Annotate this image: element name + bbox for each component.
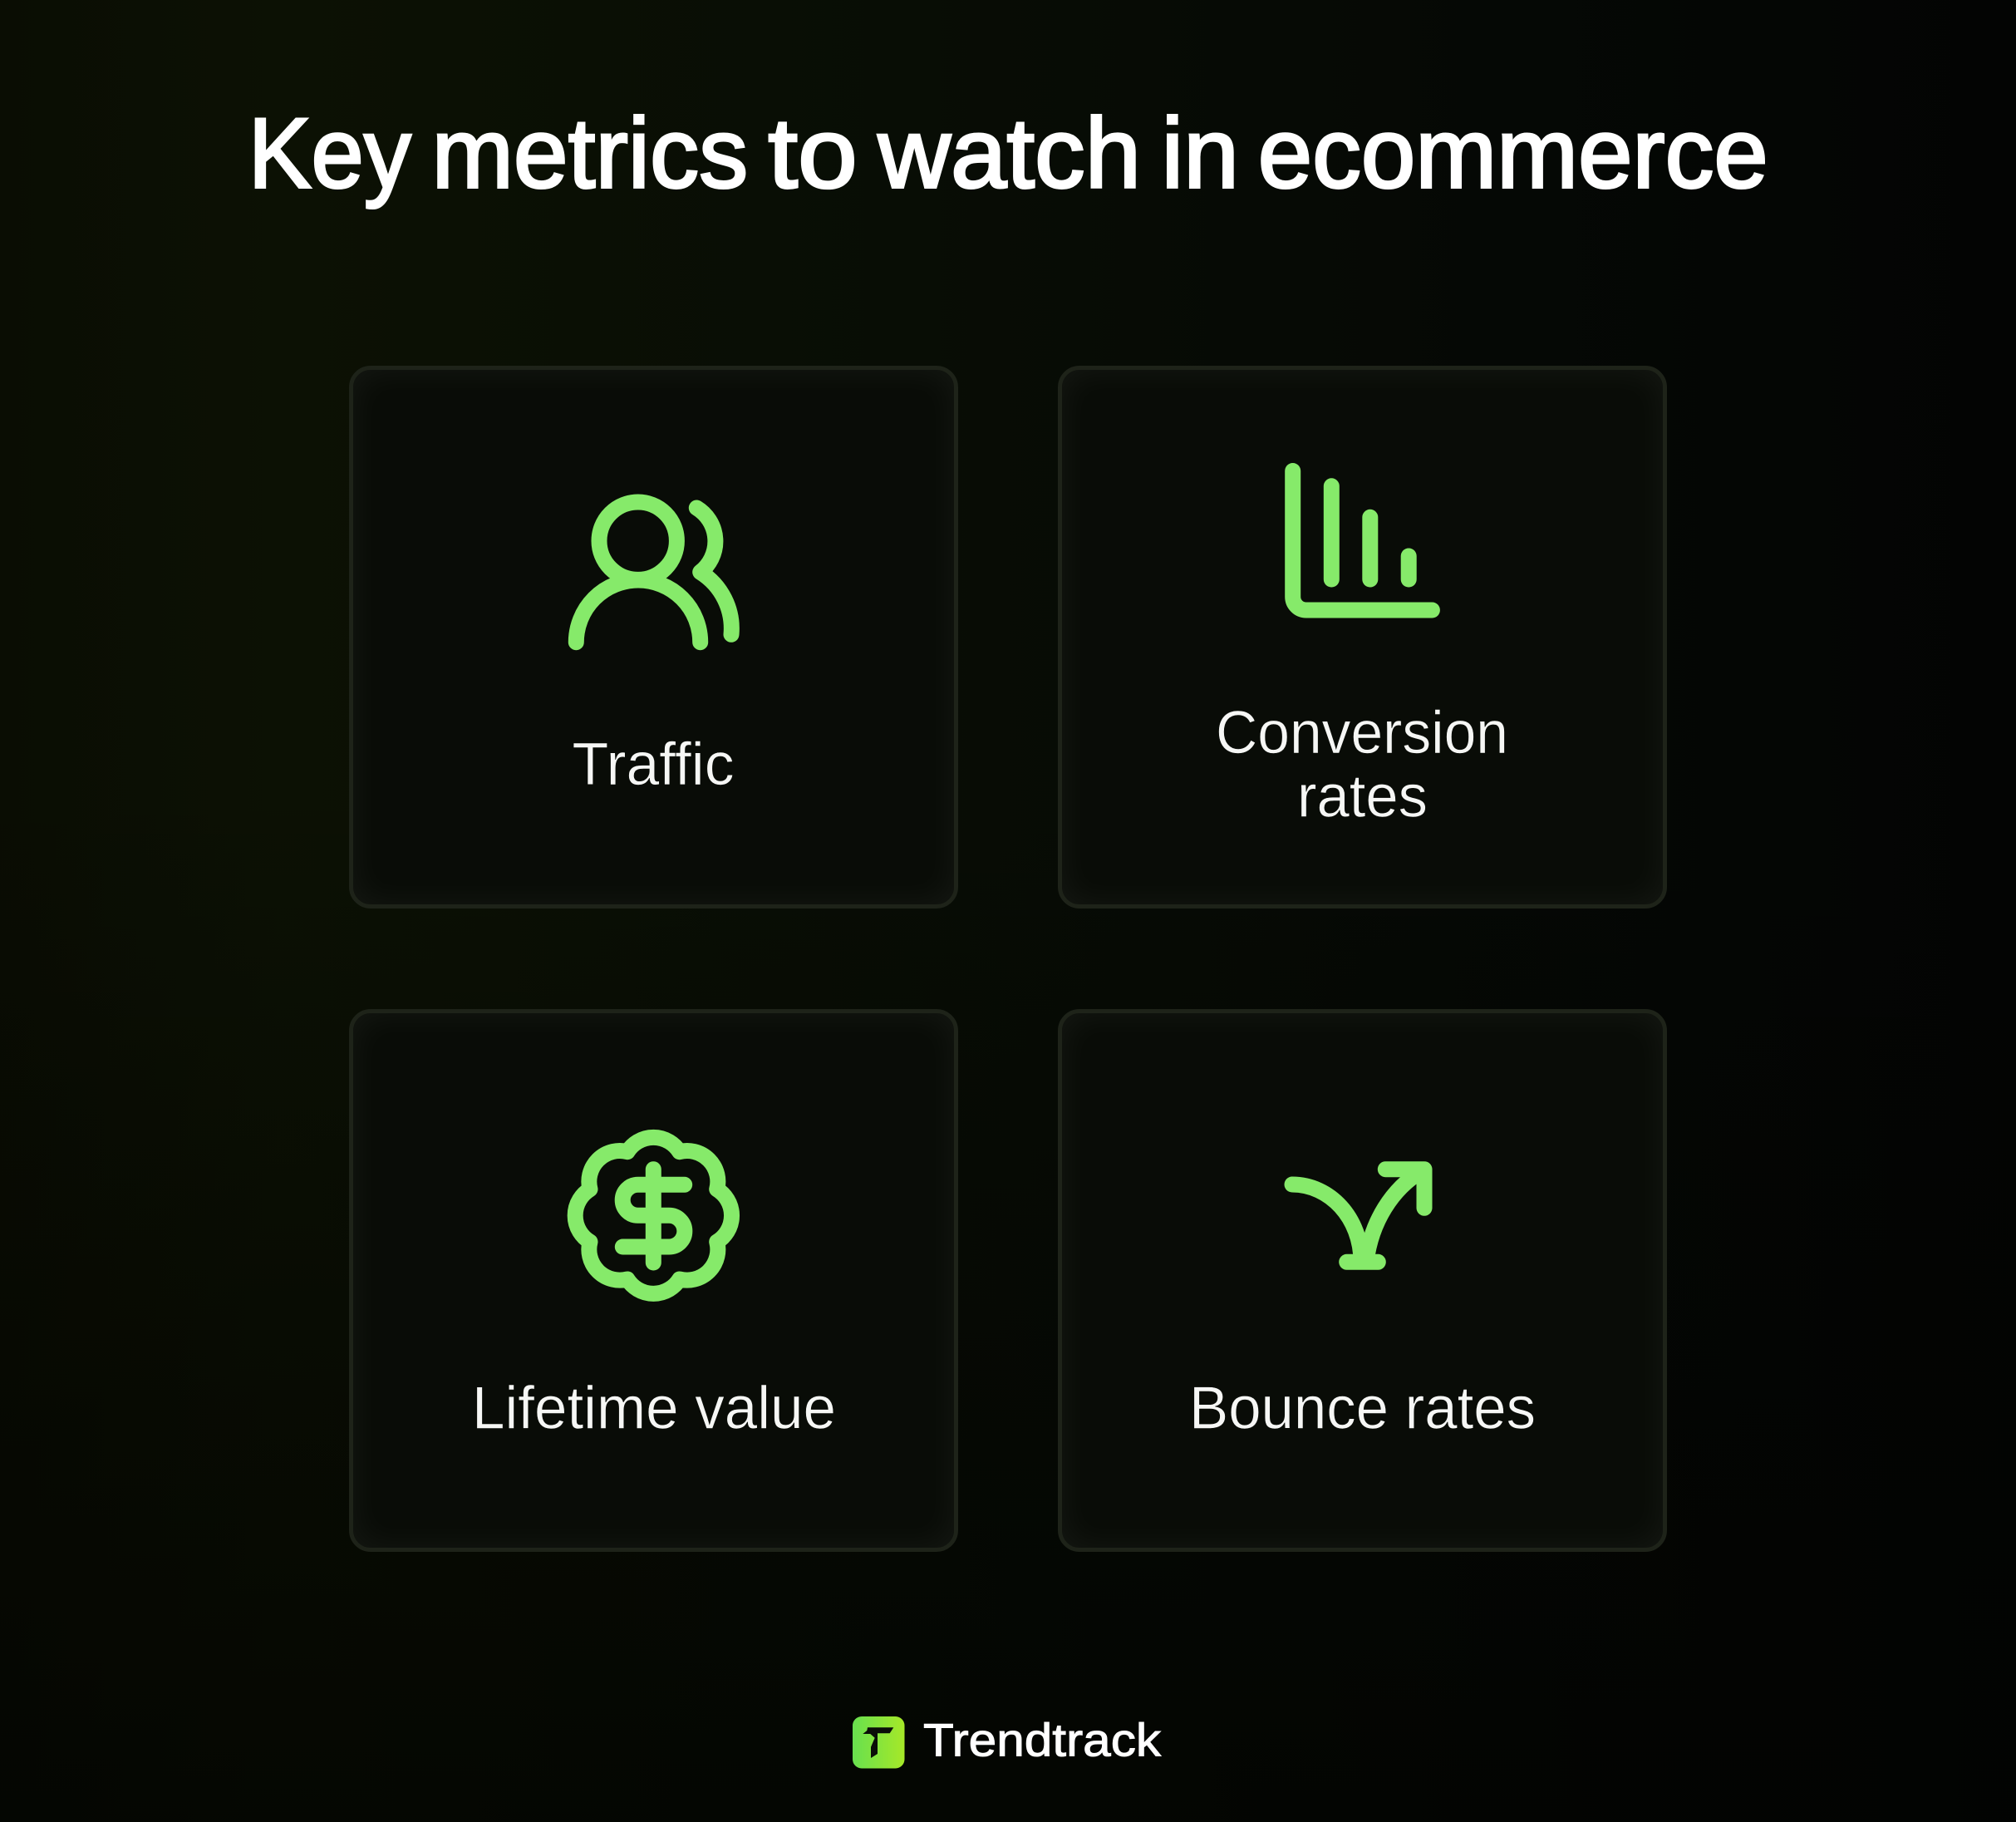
label: conversion rates	[1216, 700, 1508, 830]
label: lifetime value: Lifetime value	[472, 1375, 836, 1441]
wordmark: Trendtrack	[923, 1714, 1162, 1766]
title: in	[1162, 98, 1239, 209]
icon: bounce arrow	[1292, 1170, 1424, 1262]
panel: lifetime value	[349, 1009, 958, 1552]
label: conversion rates: Conversion	[1216, 700, 1508, 766]
panel: conversion rates	[1058, 366, 1667, 909]
label: conversion rates: rates	[1297, 763, 1428, 830]
title: Key	[248, 98, 411, 209]
icon: users	[576, 502, 731, 643]
title: metrics	[432, 98, 748, 209]
title: to	[768, 98, 858, 209]
icon: logo mark	[853, 1716, 904, 1769]
icon: bar chart	[1293, 470, 1432, 610]
panel: traffic	[349, 366, 958, 909]
title: watch	[877, 98, 1141, 209]
panel: bounce rates	[1058, 1009, 1667, 1552]
title	[248, 98, 1768, 209]
label: bounce rates: Bounce rates	[1189, 1375, 1536, 1441]
icon: dollar badge	[575, 1137, 732, 1293]
title: ecommerce	[1258, 98, 1768, 209]
logo: Trendtrack	[853, 1714, 1162, 1769]
label: traffic: Traffic	[572, 731, 735, 798]
